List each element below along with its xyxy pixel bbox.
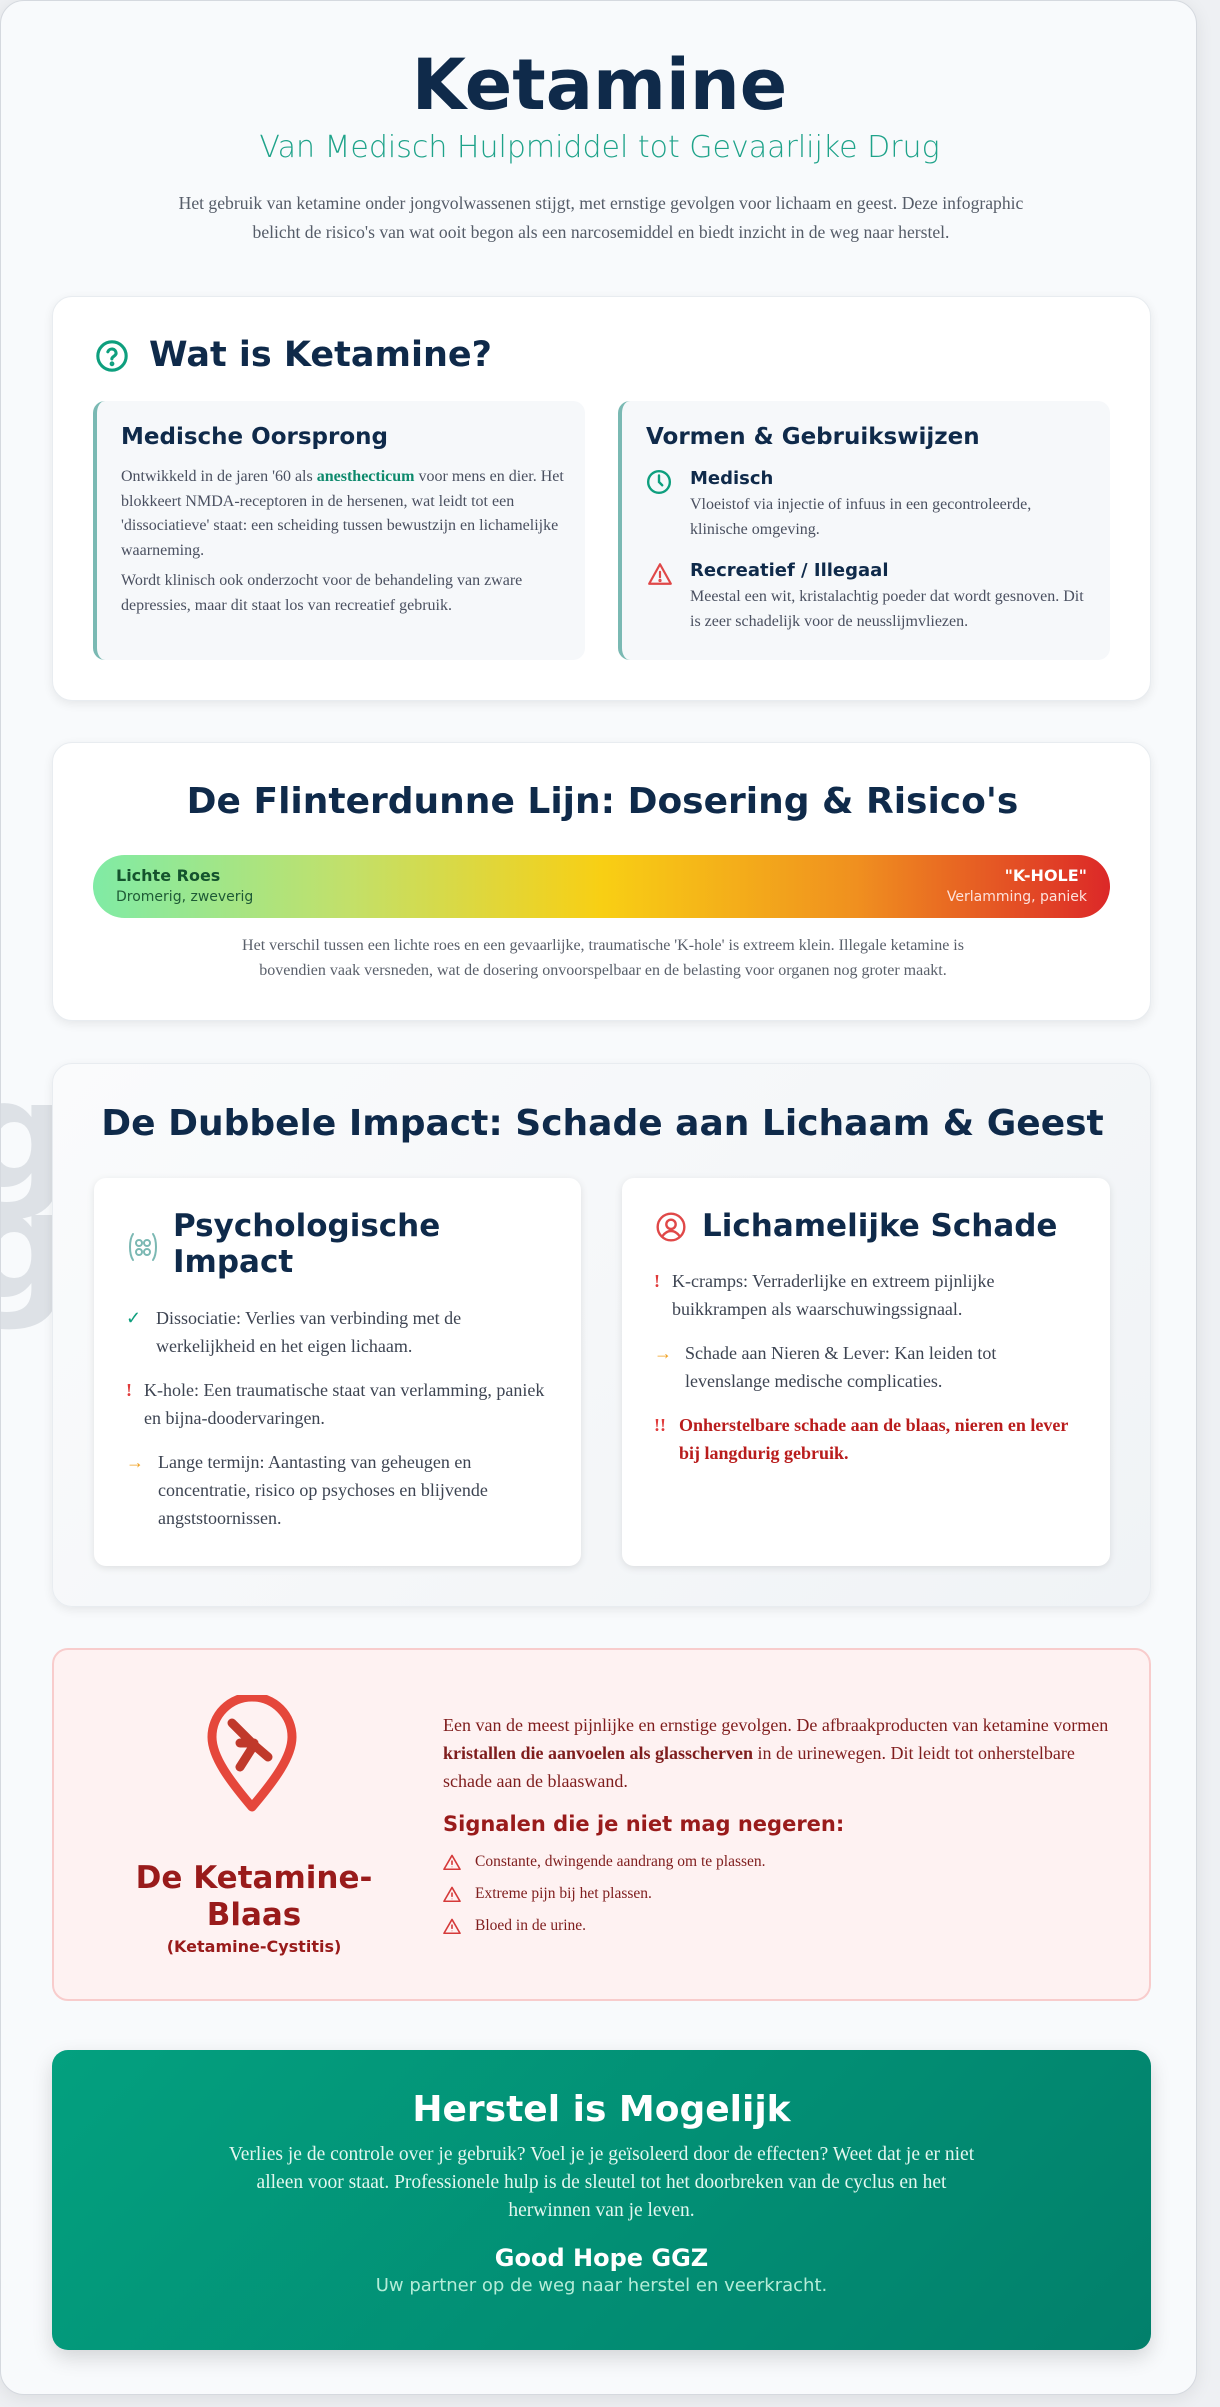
sub-panel: psychologische impact: Psychologische	[173, 1208, 440, 1244]
sub-panel: lichamelijke schade	[622, 1178, 1110, 1566]
organisation: Good Hope GGZ	[495, 2244, 708, 2272]
item: recreatief: Recreatief / Illegaal	[690, 560, 888, 581]
list: psychological effects	[126, 1308, 544, 1528]
list: psychological effects: Dissociatie: Verlies van verbinding met de werkelijkheid en het eigen lichaam.	[156, 1308, 461, 1356]
panel: herstel is mogelijk	[52, 2050, 1151, 2350]
organisation	[376, 2244, 827, 2296]
sub-panel: vormen & gebruikswijzen: Vormen & Gebruikswijzen	[646, 424, 980, 450]
icon: clock	[647, 470, 671, 494]
sub-panel: psychologische impact: Impact	[173, 1244, 293, 1280]
organisation: Uw partner op de weg naar herstel en veerkracht.	[376, 2275, 827, 2296]
panel: dosering & risico's	[52, 742, 1151, 1021]
list: physical effects: !	[654, 1271, 660, 1291]
heading: Herstel is Mogelijk	[412, 2089, 791, 2130]
title: ketamine-blaas: Blaas	[207, 1897, 301, 1933]
list: signals: Bloed in de urine.	[475, 1917, 586, 1934]
item: recreatief	[648, 560, 1084, 630]
gradient risk bar	[93, 855, 1110, 918]
icon: question circle	[96, 340, 128, 372]
list: physical effects: Onherstelbare schade aan de blaas, nieren en lever bij langdurig gebruik.	[679, 1415, 1068, 1463]
title: ketamine-blaas: (Ketamine-Cystitis)	[167, 1937, 341, 1956]
panel: ketamine-blaas	[52, 1648, 1151, 2001]
gradient risk bar: Verlamming, paniek	[947, 889, 1087, 905]
icon: warning	[648, 563, 672, 585]
list: signals: Constante, dwingende aandrang om te plassen.	[475, 1853, 766, 1870]
list: physical effects: →	[654, 1343, 672, 1363]
list: physical effects: !!	[654, 1415, 666, 1435]
title: ketamine-blaas: De Ketamine-	[136, 1860, 372, 1896]
list: psychological effects: ✓	[126, 1308, 141, 1328]
heading: wat is ketamine: Wat is Ketamine?	[149, 335, 492, 375]
text: Verlies je de controle over je gebruik? Voel je je geïsoleerd door de effecten? Weet dat je er niet alleen voor staat. Professionele hulp is de sleutel tot het doorbreken van de cyclus en het herwinnen van je leven.	[229, 2144, 974, 2221]
intro text: Het gebruik van ketamine onder jongvolwassenen stijgt, met ernstige gevolgen voor lichaam en geest. Deze infographic belicht de risico's van wat ooit begon als een narcosemiddel en biedt inzicht in de weg naar herstel.	[179, 193, 1023, 242]
decorative background letters	[0, 1049, 70, 1333]
heading: signalen: Signalen die je niet mag negeren:	[443, 1812, 844, 1836]
list: signals: Extreme pijn bij het plassen.	[475, 1885, 652, 1902]
item: medisch: Medisch	[690, 468, 773, 489]
sub-panel: medische oorsprong: Wordt klinisch ook onderzocht voor de behandeling van zware depressies, maar dit staat los van recreatief gebruik.	[121, 572, 522, 614]
icon: bladder pin	[208, 1695, 296, 1812]
panel: wat is ketamine	[52, 296, 1151, 701]
item: medisch	[647, 468, 1031, 538]
sub-panel: medische oorsprong	[93, 401, 585, 660]
gradient risk bar: "K-HOLE"	[1005, 866, 1087, 885]
list: psychological effects: !	[126, 1380, 132, 1400]
list: psychological effects: Lange termijn: Aantasting van geheugen en concentratie, risico op psychoses en blijvende angststoornissen.	[158, 1452, 488, 1528]
sub-panel: medische oorsprong: Ontwikkeld in de jaren '60 als anesthecticum voor mens en dier. Het blokkeert NMDA-receptoren in de hersenen, wat leidt tot een 'dissociatieve' staat: een scheiding tussen bewustzijn en lichamelijke waarneming.	[121, 468, 564, 558]
sub-panel: medische oorsprong: Medische Oorsprong	[121, 424, 388, 450]
item: recreatief: Meestal een wit, kristalachtig poeder dat wordt gesnoven. Dit is zeer schadelijk voor de neusslijmvliezen.	[690, 588, 1084, 630]
list: physical effects	[654, 1271, 1068, 1463]
list: psychological effects: →	[126, 1452, 144, 1472]
text: explanation: Een van de meest pijnlijke en ernstige gevolgen. De afbraakproducten van ketamine vormen kristallen die aanvoelen als glasscherven in de urinewegen. Dit leidt tot onherstelbare schade aan de blaaswand.	[443, 1715, 1108, 1791]
list: psychological effects: K-hole: Een traumatische staat van verlamming, paniek en bijna-doodervaringen.	[144, 1380, 544, 1428]
icon: user circle	[656, 1212, 686, 1242]
heading: De Flinterdunne Lijn: Dosering & Risico's	[187, 781, 1018, 822]
list: physical effects: Schade aan Nieren & Lever: Kan leiden tot levenslange medische complicaties.	[685, 1343, 996, 1391]
item: medisch: Vloeistof via injectie of infuus in een gecontroleerde, klinische omgeving.	[690, 496, 1031, 538]
sub-panel: psychologische impact	[94, 1178, 581, 1566]
gradient risk bar: Lichte Roes	[116, 866, 220, 885]
list: signals	[443, 1853, 766, 1934]
sub-panel: vormen & gebruikswijzen	[618, 401, 1110, 660]
sub-panel: lichamelijke schade: Lichamelijke Schade	[702, 1208, 1057, 1244]
title: ketamine-blaas	[136, 1860, 372, 1956]
panel: dubbele impact	[52, 1063, 1151, 1607]
icon: brain	[129, 1233, 157, 1261]
title: Ketamine	[412, 44, 787, 126]
caption: Het verschil tussen een lichte roes en een gevaarlijke, traumatische 'K-hole' is extreem klein. Illegale ketamine is bovendien vaak versneden, wat de dosering onvoorspelbaar en de belasting voor organen nog groter maakt.	[242, 937, 964, 979]
gradient risk bar: Dromerig, zweverig	[116, 889, 253, 905]
list: physical effects: K-cramps: Verraderlijke en extreem pijnlijke buikkrampen als waarschuwingssignaal.	[672, 1271, 995, 1319]
heading: De Dubbele Impact: Schade aan Lichaam & Geest	[101, 1103, 1104, 1144]
subtitle: Van Medisch Hulpmiddel tot Gevaarlijke Drug	[259, 130, 940, 165]
